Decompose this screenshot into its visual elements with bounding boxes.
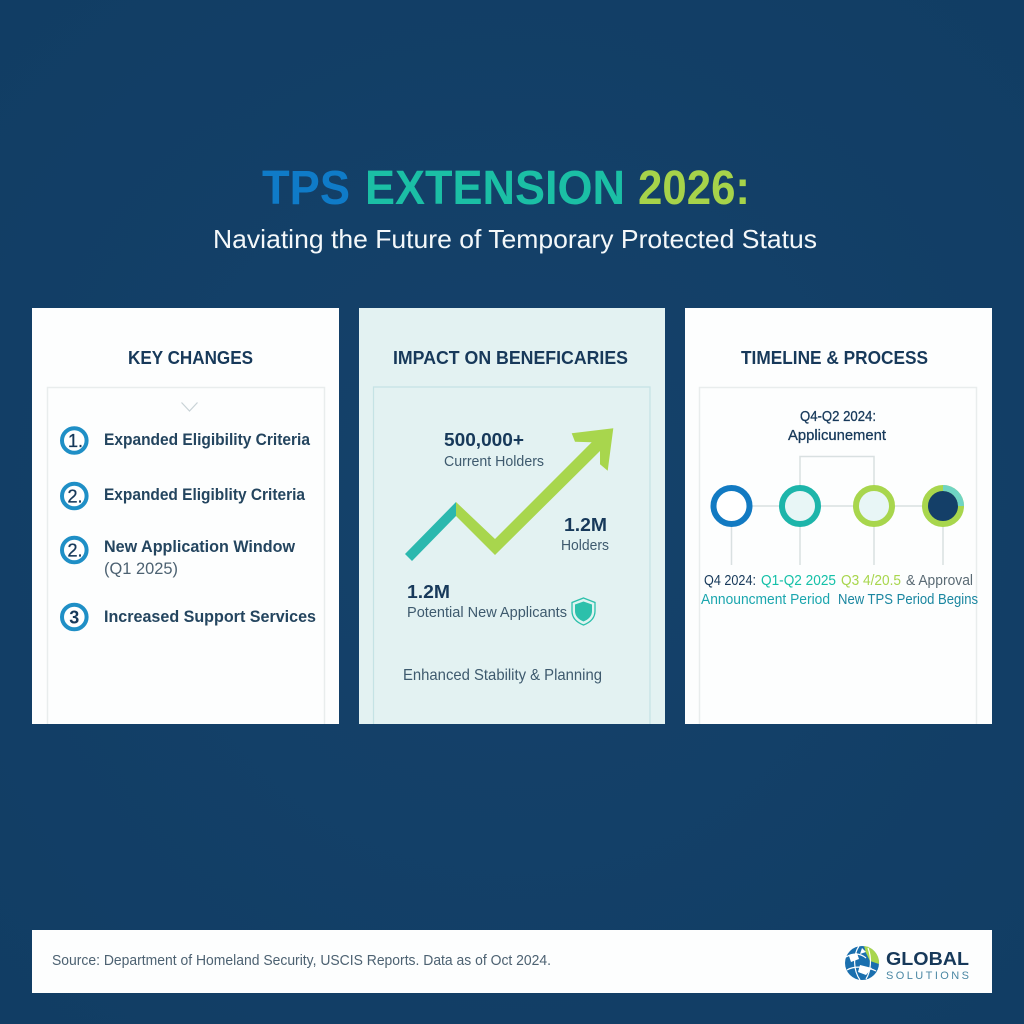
list item 3: (Q1 2025) (104, 559, 178, 578)
list item 1: 1. (68, 431, 83, 451)
timeline connectors (732, 456, 943, 565)
list item 4 (62, 605, 316, 629)
list item 2: Expanded Eligiblity Criteria (104, 485, 305, 504)
caption: Enhanced Stability & Planning (403, 667, 602, 684)
heading: timeline: TIMELINE & PROCESS (741, 348, 928, 368)
timeline labels row 2: New TPS Period Begins (838, 592, 978, 608)
panel: timeline and process (685, 308, 992, 724)
timeline node 4 (925, 485, 964, 524)
stat: current holders: Current Holders (444, 453, 544, 470)
panel: impact on beneficaries (359, 308, 665, 724)
timeline labels row 1 (704, 573, 973, 589)
list item 3 (62, 537, 296, 578)
logo: global solutions: GLOBAL (886, 949, 969, 969)
source note: Source: Department of Homeland Security, USCIS Reports. Data as of Oct 2024. (52, 953, 551, 969)
stat: current holders (444, 429, 544, 470)
timeline labels row 2: Announcment Period (701, 592, 830, 608)
panel: key changes (32, 308, 339, 724)
heading: impact: IMPACT ON BENEFICARIES (393, 348, 628, 368)
timeline node 1 (714, 488, 750, 524)
heading: key changes: KEY CHANGES (128, 348, 253, 368)
stat: potential new applicants: Potential New Applicants (407, 604, 567, 621)
timeline labels row 1: Q4 2024: (704, 573, 756, 589)
icon: chevron (182, 402, 198, 411)
logo: global solutions: SOLUTIONS (886, 970, 969, 982)
subtitle: Naviating the Future of Temporary Protected Status (213, 224, 817, 254)
stat: current holders: 500,000+ (444, 429, 524, 450)
chart: rising arrow (405, 428, 613, 561)
list item 2: 2. (67, 486, 83, 506)
list item 1 (62, 428, 310, 453)
stat: holders (561, 514, 609, 554)
stat: potential new applicants: 1.2M (407, 581, 450, 602)
stat: holders: 1.2M (564, 514, 607, 535)
title: EXTENSION (365, 162, 625, 215)
stat: potential new applicants (407, 581, 567, 621)
logo: global solutions (845, 946, 969, 982)
icon: shield (572, 598, 595, 625)
title (262, 162, 750, 215)
icon: globe (845, 946, 879, 980)
timeline labels row 1: Q3 4/20.5 (841, 573, 901, 589)
list item 4: Increased Support Services (104, 607, 316, 626)
timeline labels row 1: Q1-Q2 2025 (761, 573, 836, 589)
list item 1: Expanded Eligibility Criteria (104, 430, 310, 449)
footer bar (32, 930, 992, 993)
list item 3: New Application Window (104, 537, 296, 556)
timeline node 3 (856, 488, 892, 524)
list item 3: 2. (67, 540, 83, 560)
list item 4: 3 (69, 608, 79, 628)
timeline labels row 1: & Approval (906, 573, 973, 589)
title: 2026: (638, 162, 750, 215)
stat: holders: Holders (561, 537, 609, 554)
timeline node 2 (782, 488, 818, 524)
title: TPS (262, 162, 350, 215)
timeline labels row 2 (701, 592, 978, 608)
list item 2 (62, 484, 305, 508)
timeline top label: Q4-Q2 2024: (800, 409, 876, 425)
timeline top label (788, 409, 887, 444)
timeline top label: Applicunement (788, 427, 887, 444)
